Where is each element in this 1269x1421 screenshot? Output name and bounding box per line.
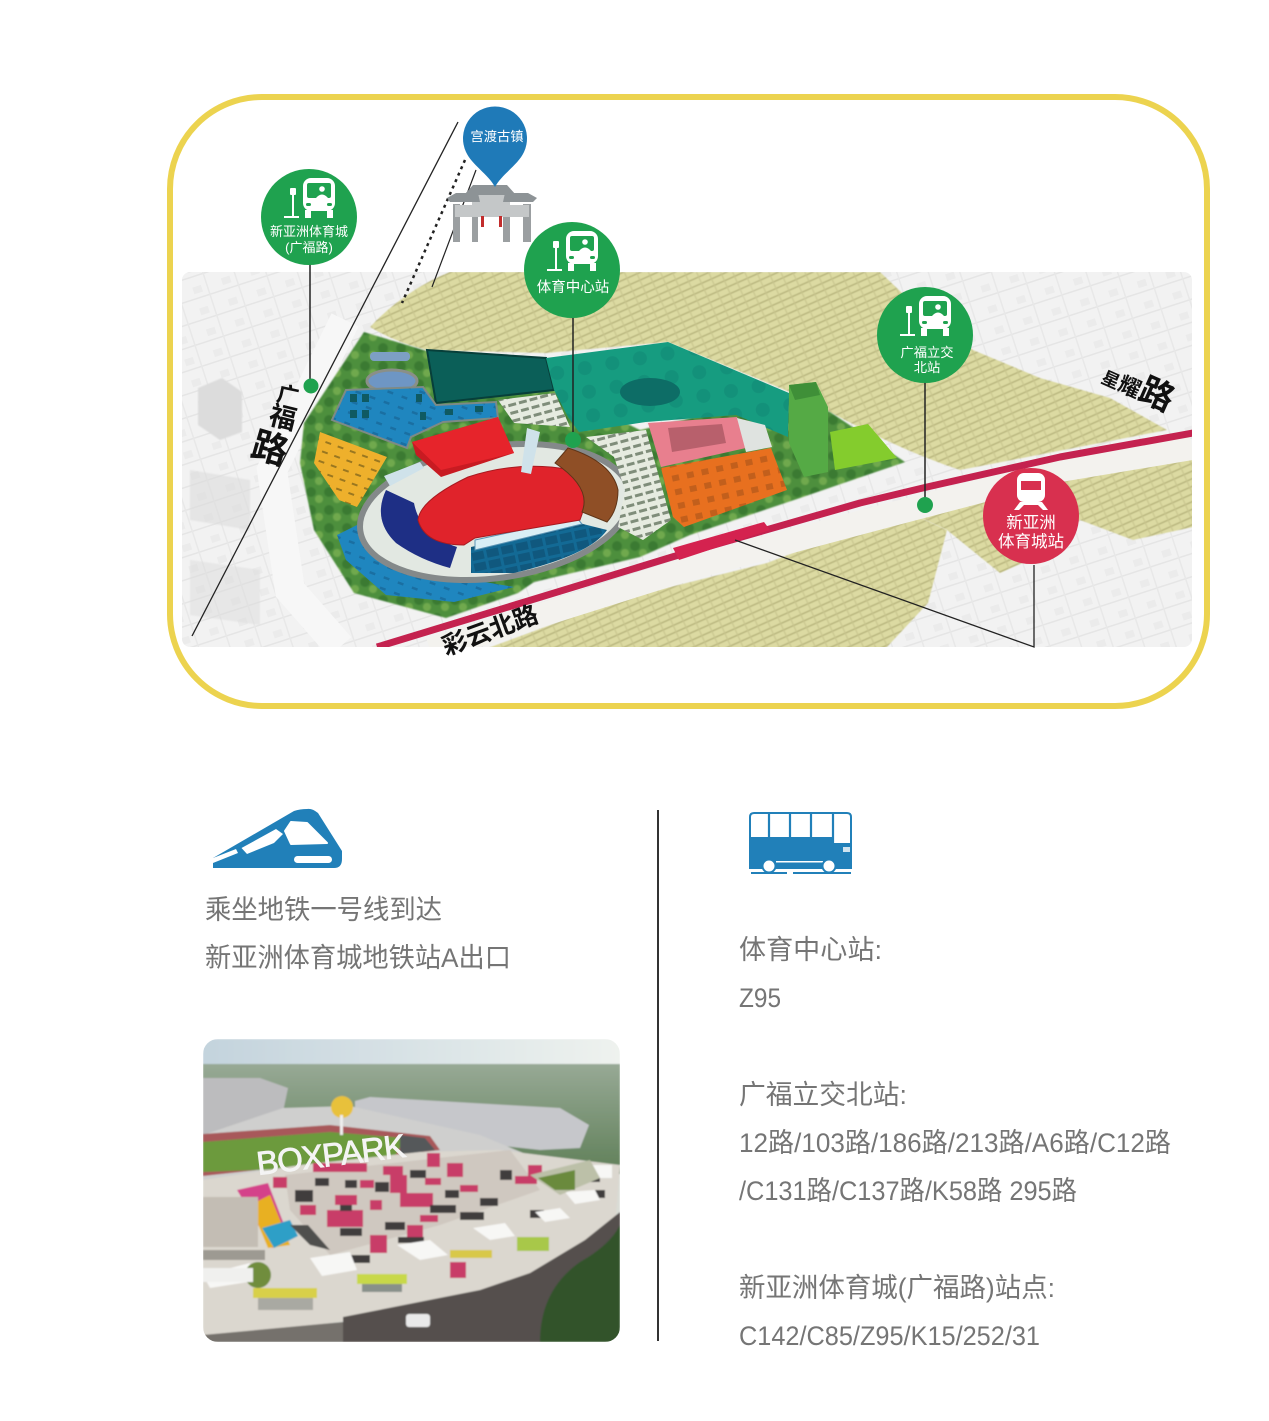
orange building	[661, 448, 787, 527]
bus route text: 新亚洲体育城(广福路)站点:	[739, 1273, 1055, 1303]
metro directions text	[205, 895, 511, 973]
bus route text: C142/C85/Z95/K15/252/31	[739, 1321, 1040, 1351]
pale plaza	[737, 418, 772, 452]
road lines to ancient town	[192, 122, 1034, 647]
lake park	[367, 352, 417, 392]
bus stop: 广福立交北站	[877, 287, 973, 513]
residential area north	[370, 272, 1167, 470]
bus stop: 新亚洲体育城(广福路)	[261, 169, 357, 394]
white road band	[430, 448, 1192, 650]
blue zone small buildings	[350, 394, 483, 420]
bus route text: /C131路/C137路/K58路 295路	[739, 1176, 1077, 1206]
zone: dark teal	[427, 350, 554, 403]
metro stop: 新亚洲体育城站	[983, 468, 1079, 564]
west-side buildings	[190, 378, 260, 625]
bus route text: Z95	[739, 983, 781, 1013]
parking east	[586, 430, 671, 540]
parking north	[498, 393, 570, 427]
bus stop: 广福立交北站: 北站	[914, 360, 940, 375]
pink building	[648, 417, 746, 467]
zone: yellow	[314, 432, 387, 507]
divider	[657, 810, 659, 1341]
pin: 宫渡古镇: 宫渡古镇	[470, 129, 524, 144]
panel: map frame	[170, 97, 1207, 706]
icon: bus	[749, 813, 852, 873]
photo: Boxpark rendering: BOXPARK	[254, 1127, 408, 1182]
road label: 广福路	[247, 381, 301, 473]
zone: navy arc	[381, 490, 457, 568]
metro station	[673, 522, 770, 560]
road label: 广福路: 福	[266, 400, 299, 436]
pin: 宫渡古镇	[463, 106, 527, 187]
icon: metro train	[213, 809, 342, 868]
metro stop: 新亚洲体育城站: 体育城站	[998, 532, 1064, 551]
road label: 彩云北路: 彩云北路	[439, 601, 542, 661]
metro line road	[377, 433, 1193, 647]
zone: blue south-west	[337, 525, 514, 602]
zone: blue north-west	[332, 387, 498, 448]
bus route text	[739, 935, 1171, 1351]
site greenery	[300, 332, 905, 618]
photo: Boxpark rendering	[203, 1039, 620, 1342]
zone: teal forest	[546, 342, 789, 437]
metro directions text: 新亚洲体育城地铁站A出口	[205, 943, 511, 973]
bus stop: 体育中心站	[524, 222, 620, 448]
road label: 广福路: 路	[247, 424, 293, 473]
residential area south	[488, 513, 947, 648]
road label: 广福路: 广	[275, 381, 301, 410]
bus stop: 广福立交北站: 广福立交	[900, 344, 954, 360]
map: aerial site plan	[182, 272, 1193, 650]
road label: 星耀路: 星耀路	[1097, 355, 1180, 419]
bus stop: 新亚洲体育城(广福路): 新亚洲体育城	[270, 224, 348, 239]
white road west of site	[272, 320, 345, 647]
green tower	[789, 382, 828, 477]
stadium ring	[357, 441, 625, 583]
brown seating	[555, 448, 618, 522]
zone: dark blue south stand	[471, 523, 607, 573]
white roof strip	[475, 518, 582, 550]
bus stop: 新亚洲体育城(广福路): (广福路)	[285, 240, 333, 255]
metro stop: 新亚洲体育城站: 新亚洲	[1006, 513, 1056, 532]
bus route text: 广福立交北站:	[739, 1080, 907, 1110]
metro directions text: 乘坐地铁一号线到达	[205, 895, 442, 925]
walkways	[384, 428, 540, 486]
red building	[412, 417, 514, 477]
light green building	[830, 424, 897, 470]
bus stop: 体育中心站: 体育中心站	[537, 279, 609, 296]
bus route text: 体育中心站:	[739, 935, 882, 965]
bus route text: 12路/103路/186路/213路/A6路/C12路	[739, 1128, 1171, 1158]
icon: ancient town gate	[447, 185, 537, 242]
residential area east	[922, 460, 1192, 574]
map base: surrounding city	[182, 272, 1192, 647]
stadium red	[418, 466, 584, 545]
